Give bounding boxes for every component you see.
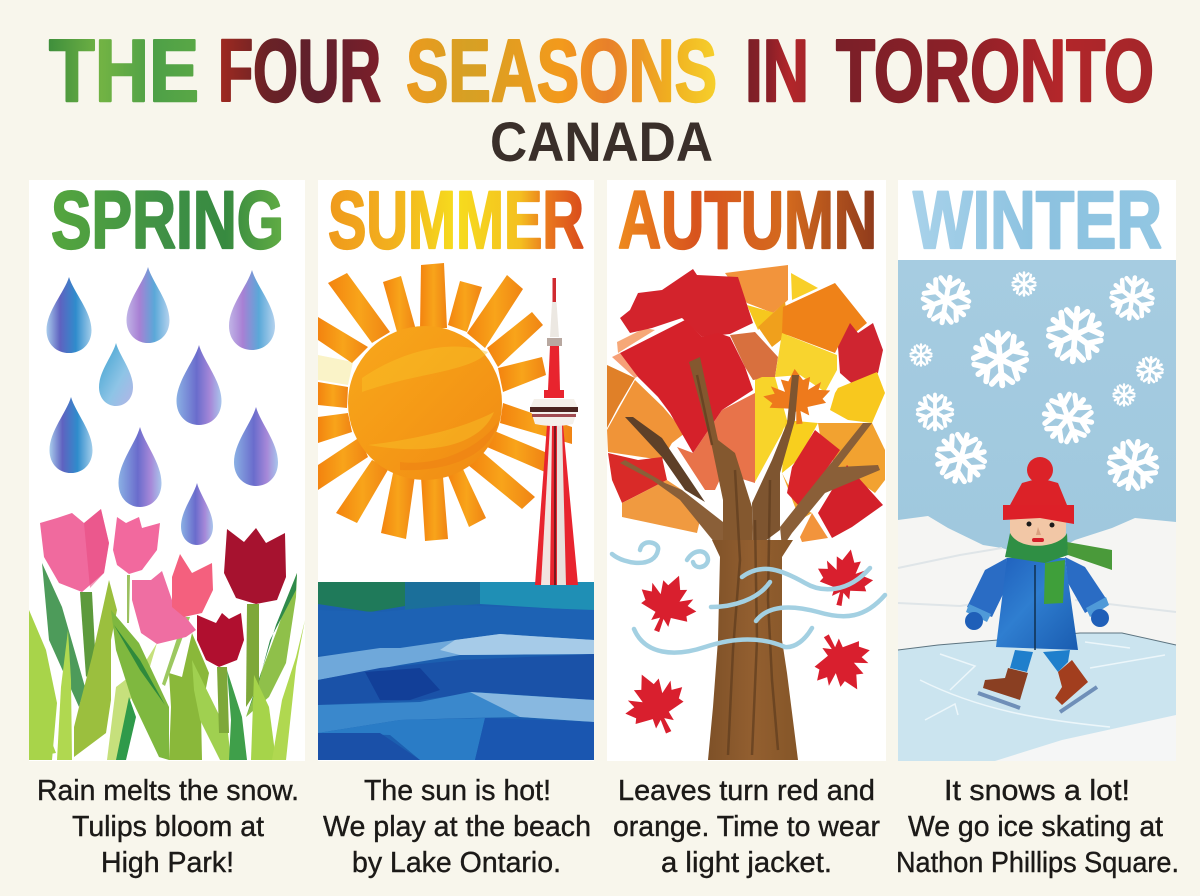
title: FOUR bbox=[218, 21, 381, 120]
panel: autumn bbox=[607, 175, 886, 761]
caption: spring: Tulips bloom at bbox=[72, 811, 264, 843]
caption: summer: We play at the beach bbox=[323, 811, 591, 843]
illustration: tree bbox=[620, 357, 880, 760]
caption: spring: Rain melts the snow. bbox=[37, 775, 299, 807]
title bbox=[49, 21, 1154, 120]
caption: autumn: a light jacket. bbox=[661, 847, 832, 879]
illustration: foliage bbox=[607, 265, 885, 542]
subtitle: CANADA bbox=[490, 110, 713, 173]
illustration: tulips and leaves bbox=[29, 509, 305, 760]
panel: winter bbox=[898, 175, 1176, 761]
heading: summer: SUMMER bbox=[328, 175, 584, 266]
illustration: lake bbox=[318, 582, 594, 760]
caption: summer bbox=[323, 775, 591, 879]
icons: snowflakes bbox=[910, 272, 1164, 494]
panel: summer bbox=[318, 175, 594, 761]
heading: autumn: AUTUMN bbox=[618, 175, 877, 266]
caption: winter bbox=[896, 775, 1179, 879]
icons: raindrops bbox=[46, 267, 278, 545]
heading: spring: SPRING bbox=[51, 175, 284, 266]
title: THE bbox=[49, 21, 199, 120]
panel: spring bbox=[29, 175, 305, 761]
icons: maple leaves bbox=[613, 544, 884, 746]
illustration: CN Tower bbox=[530, 278, 578, 585]
caption: winter: Nathon Phillips Square. bbox=[896, 847, 1179, 879]
caption: winter: We go ice skating at bbox=[908, 811, 1163, 843]
caption: autumn: orange. Time to wear bbox=[613, 811, 880, 843]
illustration: sun bbox=[318, 263, 572, 541]
illustration: ice bbox=[898, 633, 1176, 761]
illustration: snow hills bbox=[898, 516, 1176, 660]
illustration: child skating bbox=[965, 457, 1112, 712]
caption: spring bbox=[37, 775, 299, 879]
caption: summer: by Lake Ontario. bbox=[352, 847, 561, 879]
caption: summer: The sun is hot! bbox=[364, 775, 551, 807]
caption: autumn bbox=[613, 775, 880, 879]
sky bbox=[898, 260, 1176, 560]
title: SEASONS bbox=[406, 21, 717, 120]
illustration: wind swirls bbox=[612, 542, 885, 653]
title: IN bbox=[745, 21, 809, 120]
caption: autumn: Leaves turn red and bbox=[618, 775, 875, 807]
caption: spring: High Park! bbox=[101, 847, 234, 879]
caption: winter: It snows a lot! bbox=[944, 775, 1130, 807]
